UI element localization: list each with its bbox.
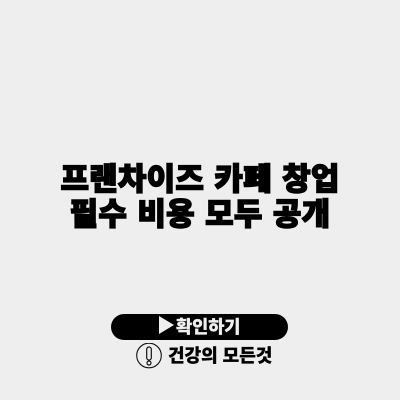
button: confirm [111,314,288,340]
icon: exclamation circle [136,343,162,368]
title line 1: 프랜차이즈 카페 창업 [60,162,340,197]
brand logo [136,343,272,368]
title line 2: 필수 비용 모두 공개 [70,197,330,232]
icon: play triangle [159,316,174,334]
brand name: 건강의 모든것 [168,346,272,366]
button label: 확인하기 [176,317,240,337]
title [60,162,340,232]
